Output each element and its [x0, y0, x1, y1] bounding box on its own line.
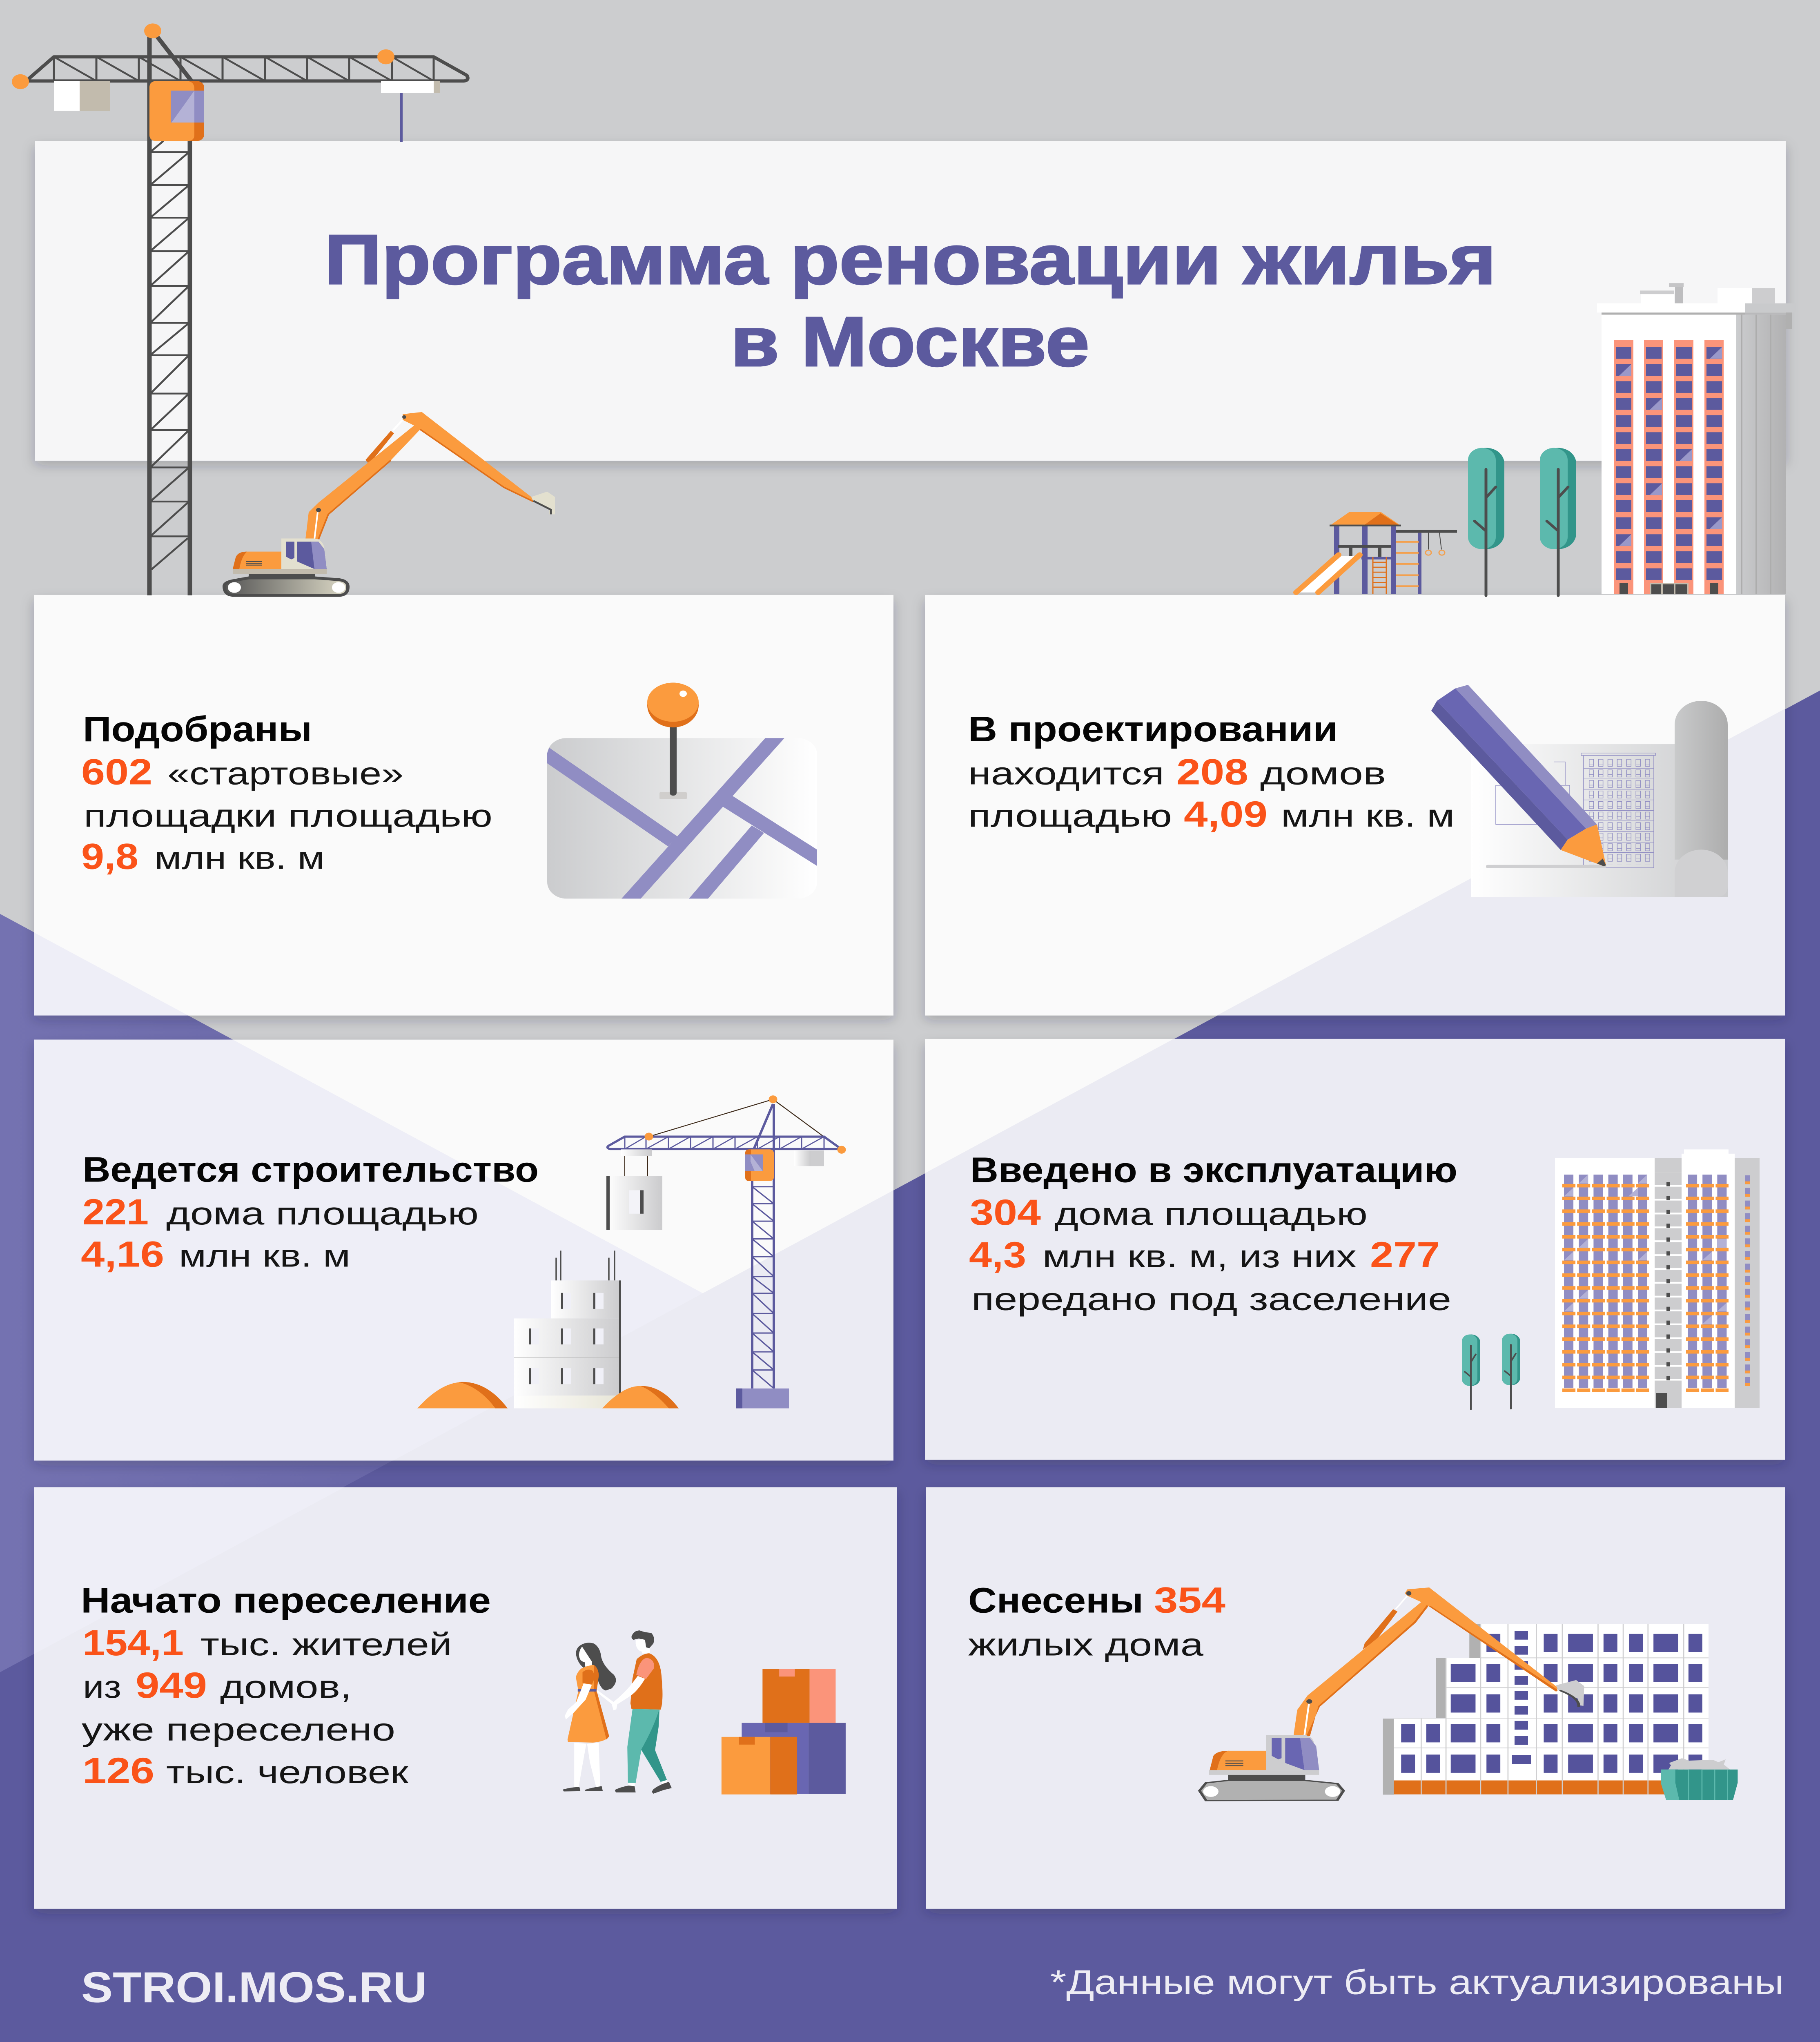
text: resettlement: 949: [136, 1665, 207, 1706]
panel: stats card 3: [34, 1040, 893, 1460]
illustration: large tower crane: [12, 23, 468, 595]
text: sites: площадки площадью: [84, 798, 492, 834]
text: demolished: [968, 1580, 1225, 1662]
text: resettlement: уже переселено: [82, 1712, 395, 1747]
panel: stats card 2: [925, 595, 1785, 1016]
text: construction: 221: [82, 1192, 149, 1232]
panel: stats card 5: [34, 1487, 897, 1909]
title: в Москве: [731, 303, 1089, 381]
icon: map with pin: [547, 683, 817, 898]
text: sites: 602: [81, 752, 152, 792]
text: resettlement: из: [83, 1669, 121, 1705]
text: design: домов: [1260, 756, 1386, 791]
illustration: finished apartment building: [1555, 1149, 1760, 1408]
text: commissioned: 4,3: [969, 1235, 1026, 1275]
illustration: trees: [1462, 1334, 1520, 1409]
text: resettlement: тыс. жителей: [200, 1626, 452, 1662]
illustration: tall tree right: [1540, 448, 1576, 596]
illustration: purple crane: [606, 1095, 846, 1408]
text: demolished: Снесены: [968, 1581, 1143, 1620]
background: grey top area: [0, 0, 1820, 1293]
text: design: находится: [968, 756, 1164, 791]
illustration: high-rise building: [1597, 283, 1796, 594]
panel: stats card 4: [925, 1039, 1785, 1460]
text: resettlement: [81, 1581, 491, 1791]
text: construction: 4,16: [81, 1234, 164, 1275]
text: resettlement: домов,: [220, 1669, 352, 1705]
illustration: moving boxes: [722, 1669, 846, 1795]
text: demolished: жилых дома: [968, 1627, 1203, 1662]
background: lighter left triangle: [0, 914, 703, 1672]
text: commissioned: 277: [1370, 1235, 1440, 1275]
text: resettlement: тыс. человек: [166, 1754, 409, 1790]
illustration: excavator: [1200, 1587, 1584, 1801]
illustration: couple: [563, 1630, 672, 1794]
text: construction: Ведется строительство: [82, 1150, 539, 1189]
text: sites: [81, 709, 492, 877]
illustration: building under construction and sand: [417, 1251, 679, 1408]
text: construction: [81, 1150, 539, 1275]
text: sites: 9,8: [81, 836, 138, 877]
text: commissioned: [969, 1150, 1457, 1317]
title: [324, 221, 1496, 381]
text: sites: млн кв. м: [154, 840, 325, 876]
text: commissioned: передано под заселение: [971, 1281, 1451, 1317]
footer: site name: STROI.MOS.RU: [81, 1964, 427, 2012]
text: sites: «стартовые»: [167, 756, 403, 791]
text: commissioned: Введено в эксплуатацию: [970, 1150, 1457, 1190]
text: construction: дома площадью: [166, 1195, 479, 1231]
text: design: 4,09: [1184, 794, 1268, 834]
panel: stats card 6: [926, 1487, 1785, 1909]
illustration: debris container: [1661, 1758, 1738, 1800]
text: commissioned: 304: [970, 1192, 1041, 1233]
text: demolished: 354: [1154, 1580, 1225, 1621]
panel: stats card 1: [34, 595, 893, 1016]
text: design: 208: [1176, 752, 1248, 792]
text: design: млн кв. м: [1281, 798, 1455, 834]
illustration: panel building being demolished: [1383, 1624, 1709, 1795]
text: construction: млн кв. м: [179, 1238, 350, 1273]
text: design: В проектировании: [968, 709, 1338, 749]
text: commissioned: млн кв. м, из них: [1043, 1239, 1357, 1274]
illustration: long-reach excavator on top: [224, 412, 555, 595]
footer: disclaimer: *Данные могут быть актуализированы: [1050, 1963, 1784, 2002]
text: sites: Подобраны: [83, 709, 312, 749]
text: resettlement: 126: [82, 1750, 154, 1791]
icon: blueprint and pencil: [1431, 685, 1728, 897]
text: commissioned: дома площадью: [1054, 1196, 1368, 1231]
text: resettlement: Начато переселение: [81, 1581, 491, 1620]
text: resettlement: 154,1: [82, 1623, 184, 1663]
text: design: [968, 709, 1455, 834]
title: Программа реновации жилья: [324, 221, 1496, 299]
illustration: playground: [1296, 512, 1457, 594]
text: design: площадью: [968, 798, 1172, 834]
illustration: tall tree left: [1468, 448, 1504, 596]
panel: title: [35, 141, 1786, 461]
